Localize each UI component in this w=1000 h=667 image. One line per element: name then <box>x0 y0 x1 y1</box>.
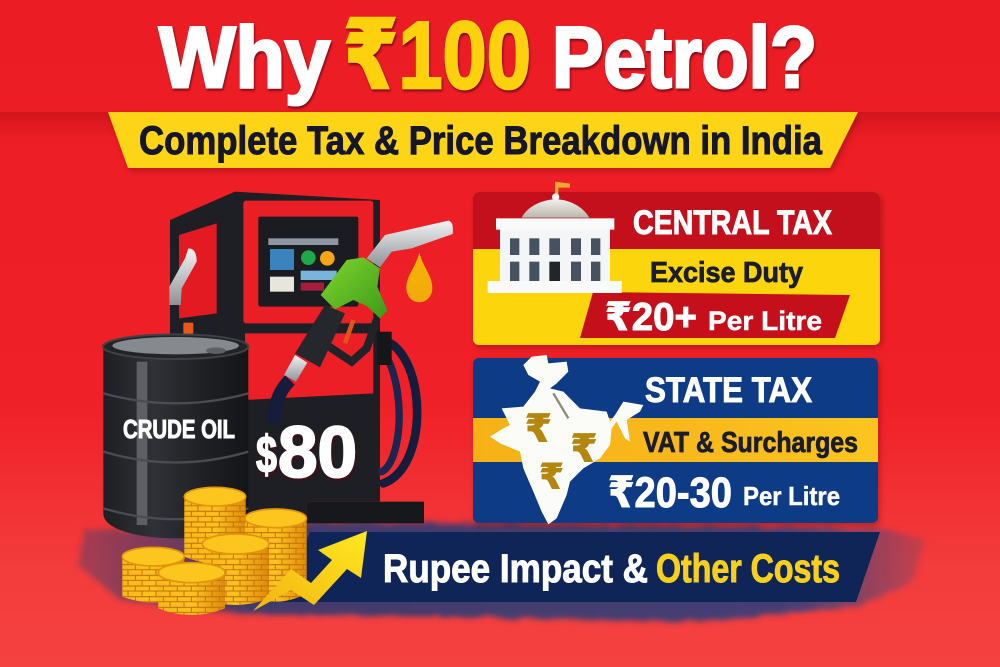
barrel lid <box>103 334 248 359</box>
rupee symbols: ₹ <box>571 428 597 471</box>
coin stack middle <box>202 534 269 605</box>
icon: rising arrow <box>253 531 367 611</box>
pump lower red panel <box>245 333 373 400</box>
barrel highlight <box>137 362 147 525</box>
barrel cap <box>206 347 226 354</box>
nozzle collar <box>284 355 307 382</box>
icon: gold coins <box>122 487 307 615</box>
blue ground smear <box>78 522 925 622</box>
pump side red panel <box>179 223 217 318</box>
side nozzle hook <box>169 248 197 305</box>
central tax unit: Per Litre <box>708 306 822 336</box>
$80 price: $ <box>256 426 277 484</box>
title: ₹100 <box>343 2 531 109</box>
banner text: Rupee Impact & <box>383 547 648 591</box>
map outline <box>490 355 643 524</box>
pump body <box>170 192 380 530</box>
icon: crude oil barrel <box>103 334 248 538</box>
central tax heading: CENTRAL TAX <box>633 204 832 242</box>
panel: central tax <box>473 192 880 345</box>
icon: parliament building <box>488 182 622 293</box>
nozzle trigger guard <box>327 320 377 362</box>
pump screen <box>258 217 358 307</box>
state tax unit: Per Litre <box>743 481 840 511</box>
icon: fuel pump <box>169 192 453 530</box>
icon: india map <box>490 355 643 524</box>
vat label: VAT & Surcharges <box>643 427 858 459</box>
nozzle trigger <box>345 320 353 343</box>
rupee symbols: ₹ <box>539 457 564 496</box>
building base <box>488 281 622 293</box>
bottom banner: Other Costs <box>656 547 840 591</box>
flag <box>555 182 570 196</box>
$80 price: 80 <box>278 413 357 493</box>
pump front red panel <box>243 201 373 323</box>
right hose loop <box>382 340 417 483</box>
title: Why <box>159 10 330 106</box>
panel: state tax <box>473 358 878 523</box>
barrel ribs <box>103 393 248 519</box>
pump base <box>307 502 424 523</box>
small orange button <box>183 323 193 334</box>
coin stack front left <box>122 547 184 602</box>
windows <box>510 238 600 281</box>
map divider <box>553 393 568 418</box>
hose holder <box>377 332 392 365</box>
nozzle spout <box>367 221 453 267</box>
building body <box>500 228 610 282</box>
nozzle handle <box>295 305 345 367</box>
price ribbon <box>580 292 850 338</box>
nozzle green grip <box>321 257 387 318</box>
title: Petrol? <box>552 10 817 106</box>
oil drop <box>406 253 432 302</box>
coin stack back left <box>184 487 246 563</box>
rupee symbols: ₹ <box>525 408 552 451</box>
subtitle ribbon: Complete Tax & Price Breakdown in India <box>139 119 823 163</box>
state tax heading: STATE TAX <box>645 371 813 410</box>
central tax amount: ₹20+ <box>605 296 697 339</box>
header band shadow <box>0 112 1000 138</box>
rupee symbols <box>525 408 597 496</box>
dome <box>522 199 589 218</box>
bottom banner <box>282 532 880 602</box>
coin stack back right <box>245 509 307 602</box>
excise duty label: Excise Duty <box>650 257 803 289</box>
title <box>159 2 817 109</box>
state tax amount: ₹20-30 <box>608 469 732 517</box>
nozzle hose <box>273 380 290 423</box>
coin stack front <box>158 563 225 615</box>
crude oil label: CRUDE OIL <box>123 414 235 444</box>
barrel body <box>103 346 248 538</box>
